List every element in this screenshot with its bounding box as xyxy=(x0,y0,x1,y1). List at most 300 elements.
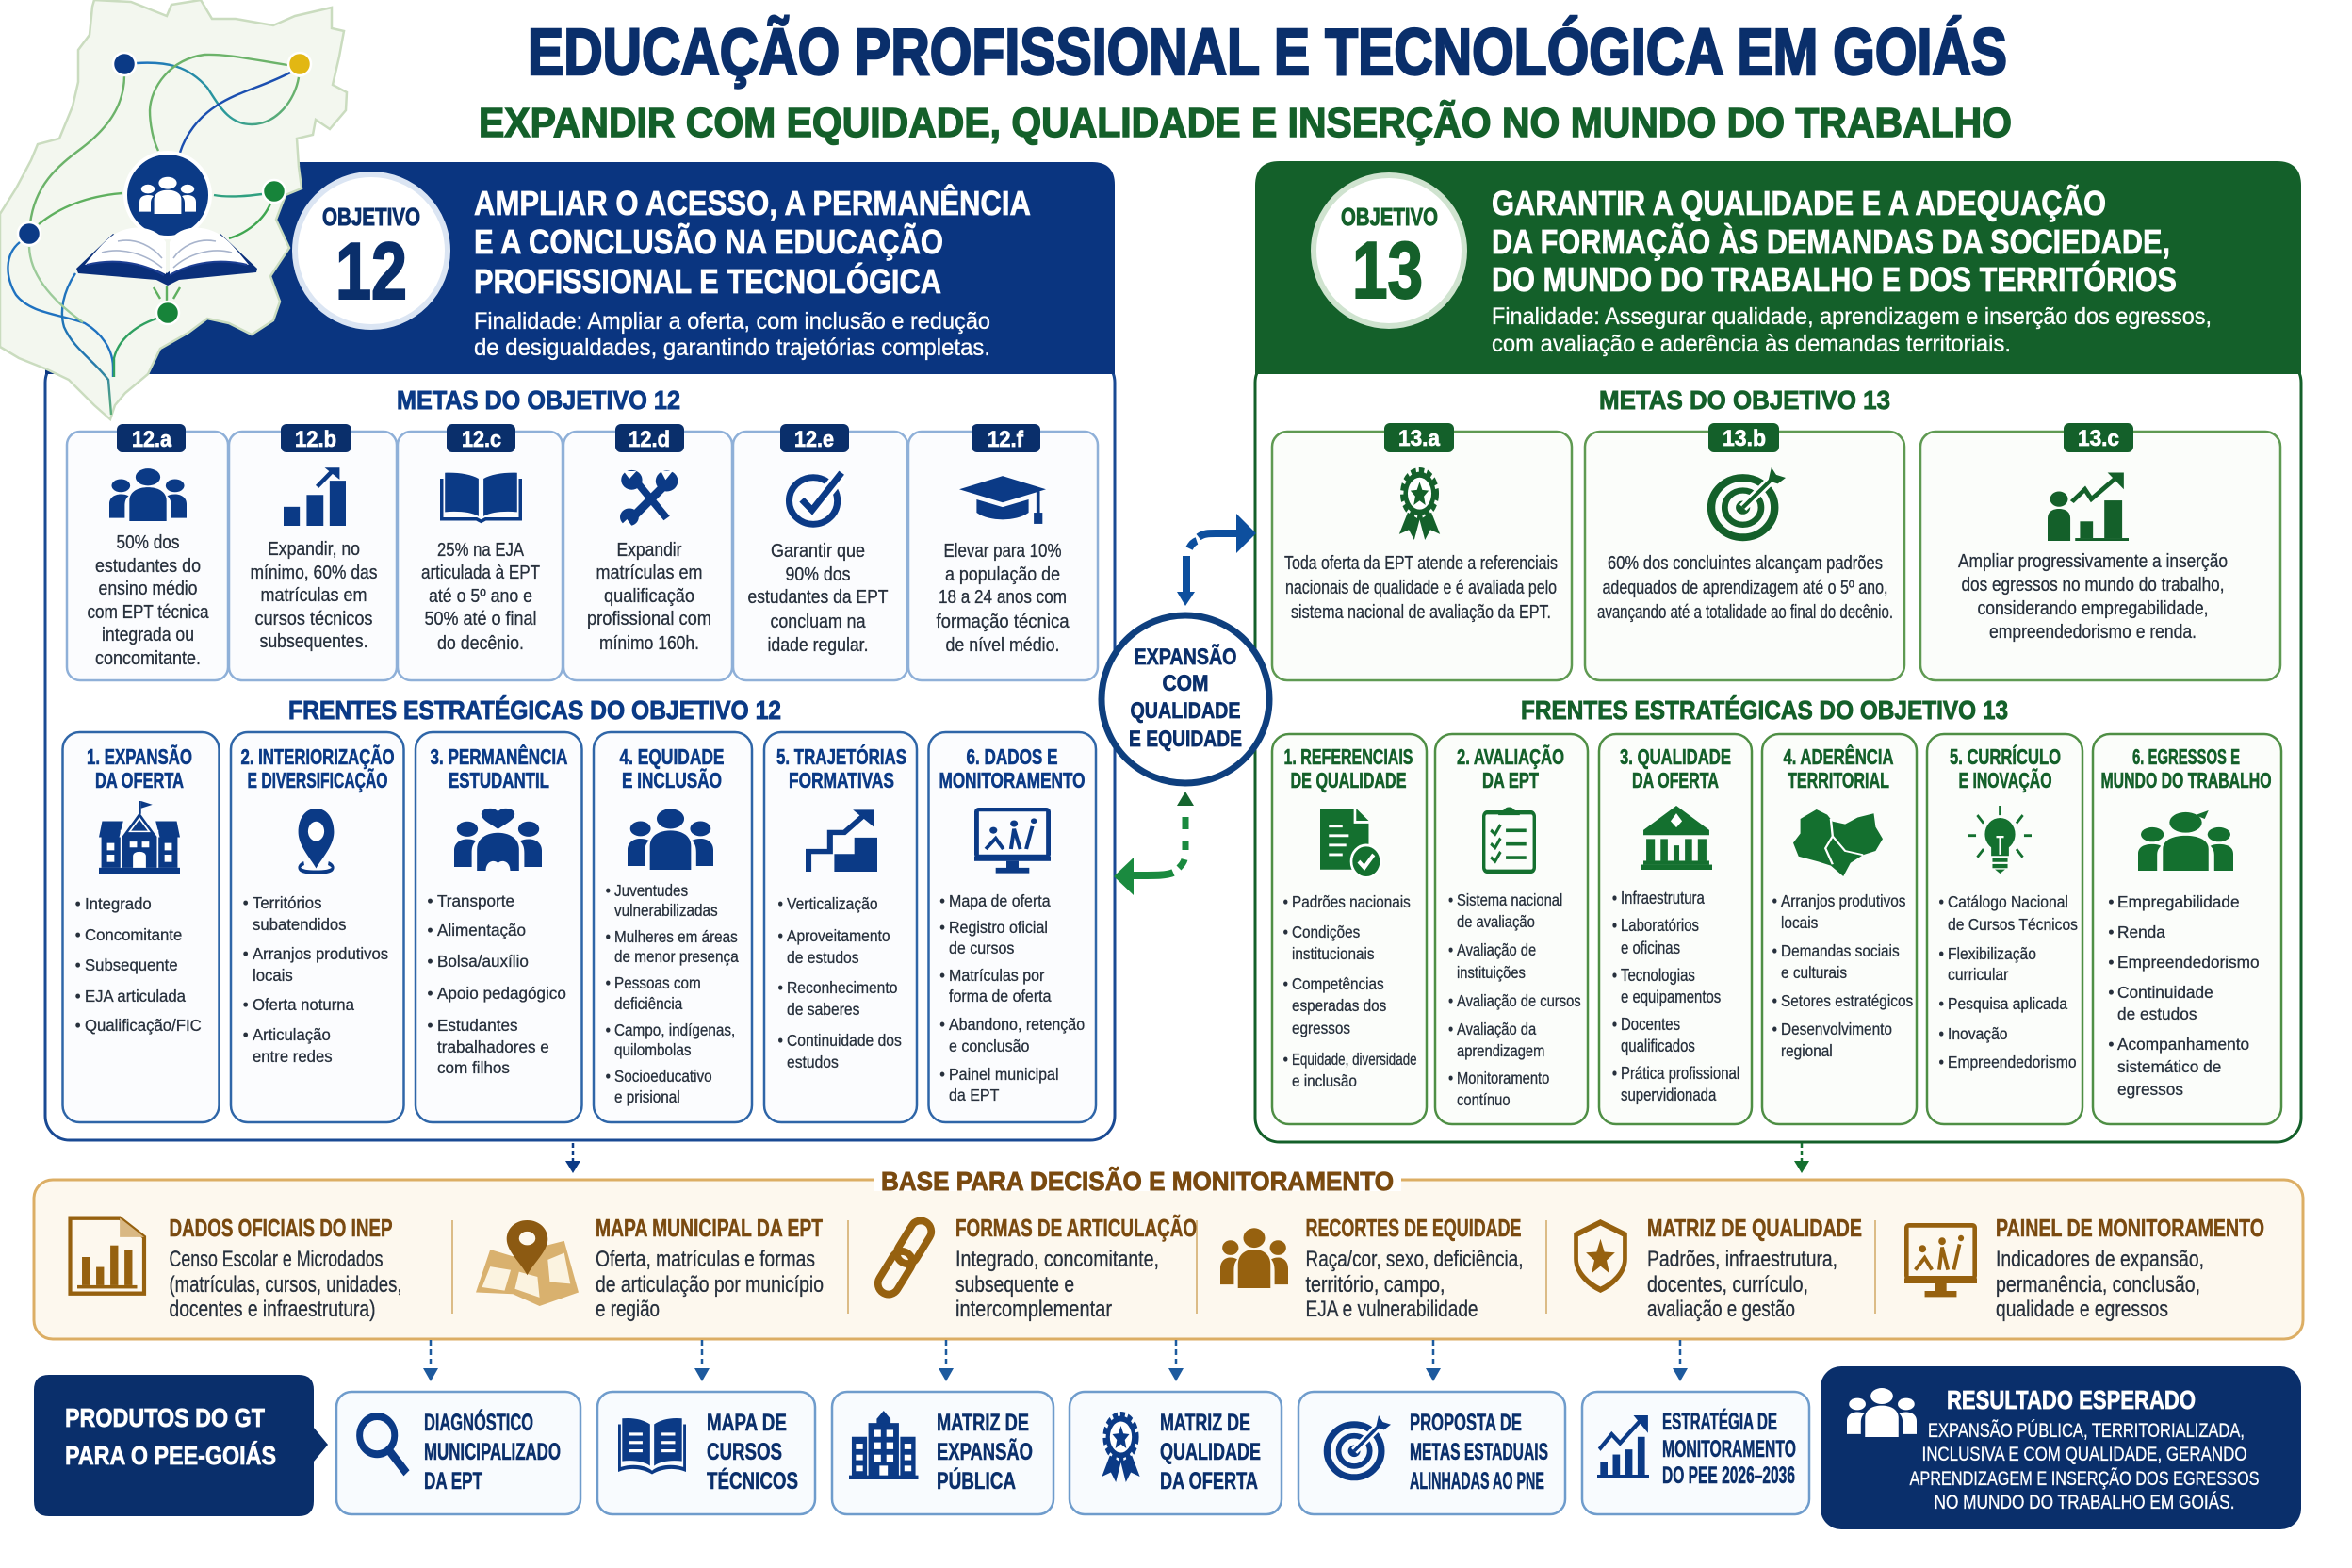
product: mapa de cursos: TÉCNICOS xyxy=(707,1467,798,1494)
product: estratégia de monitoramento: ESTRATÉGIA DE xyxy=(1662,1408,1777,1435)
badge: objetivo 12: OBJETIVO xyxy=(322,203,420,231)
frente 13.3: • xyxy=(1612,1064,1617,1083)
frente 12.6: da EPT xyxy=(949,1086,999,1104)
meta 12.f: de nível médio. xyxy=(946,635,1059,656)
base item: matriz de qualidade: MATRIZ DE QUALIDADE xyxy=(1647,1214,1862,1242)
frente 13.6: 6. EGRESSOS E xyxy=(2132,744,2240,769)
box: produtos do GT: PARA O PEE-GOIÁS xyxy=(65,1441,276,1470)
heading: metas 12: METAS DO OBJETIVO 12 xyxy=(397,385,680,415)
meta 12.a: 12.a xyxy=(132,427,172,452)
base title: BASE PARA DECISÃO E MONITORAMENTO xyxy=(881,1167,1394,1196)
badge: objetivo 13: 13 xyxy=(1352,226,1423,316)
base item: mapa municipal da EPT: de articulação por município xyxy=(596,1272,824,1298)
meta 12.a: integrada ou xyxy=(102,625,194,645)
meta 12.e: Garantir que xyxy=(771,541,865,562)
arrow: objetivo 12 to base xyxy=(565,1143,580,1173)
frente 13.6: • xyxy=(2108,1035,2114,1054)
base item: recortes de equidade: RECORTES DE EQUIDADE xyxy=(1306,1214,1521,1242)
frente 13.4: regional xyxy=(1781,1041,1833,1060)
frente 13.3: • xyxy=(1612,1015,1617,1034)
frente 13.4 xyxy=(1762,734,1917,1124)
frente 13.1 xyxy=(1272,734,1427,1124)
meta 12.c: 12.c xyxy=(462,427,501,452)
frente 13.2: • xyxy=(1448,992,1453,1010)
open book xyxy=(76,228,257,286)
frente 13.2: Sistema nacional xyxy=(1457,891,1562,909)
objetivo 12 header xyxy=(45,162,1115,374)
badge: objetivo 13 xyxy=(1314,175,1464,326)
frente 13.2: instituições xyxy=(1457,964,1526,982)
frente 13.3: • xyxy=(1612,916,1617,935)
frente 13.3: supervidionada xyxy=(1621,1086,1717,1104)
base item: matriz de qualidade: Padrões, infraestrutura, xyxy=(1647,1247,1838,1272)
frente 12.4: 4. EQUIDADE xyxy=(620,744,724,769)
meta 12.b: matrículas em xyxy=(260,585,368,606)
frente 13.5: • xyxy=(1938,892,1944,911)
frente 12.2: subatendidos xyxy=(253,914,347,934)
frente 13.1: institucionais xyxy=(1292,944,1375,963)
frente 12.4: Juventudes xyxy=(614,881,688,900)
frente 13.2: DA EPT xyxy=(1482,768,1539,792)
center hub: expansão com qualidade e equidade: EXPANSÃO xyxy=(1135,644,1236,670)
frente 13.2: 2. AVALIAÇÃO xyxy=(1457,743,1564,769)
frente 13.1: esperadas dos xyxy=(1292,996,1386,1015)
frente 12.3: • xyxy=(428,984,433,1003)
panel: objetivo 12 xyxy=(45,162,1115,1140)
frente 12.2: • xyxy=(243,994,249,1014)
meta 12.e: 90% dos xyxy=(786,564,850,585)
frente 12.4: e prisional xyxy=(614,1087,680,1106)
base item: dados oficiais do INEP: (matrículas, cursos, unidades, xyxy=(170,1272,401,1298)
frente 12.3: trabalhadores e xyxy=(437,1037,549,1056)
frente 12.2: Arranjos produtivos xyxy=(253,943,388,963)
meta 13.c: Ampliar progressivamente a inserção xyxy=(1958,551,2228,572)
box: resultado esperado: NO MUNDO DO TRABALHO EM GOIÁS. xyxy=(1934,1492,2235,1513)
meta 12.b: subsequentes. xyxy=(260,631,368,652)
frente 12.1: DA OFERTA xyxy=(95,768,184,792)
frente 13.6: • xyxy=(2108,923,2114,941)
frente 13.2: aprendizagem xyxy=(1457,1042,1544,1060)
frente 12.4: • xyxy=(606,973,611,992)
product: estratégia de monitoramento xyxy=(1582,1392,1809,1514)
frente 12.3: • xyxy=(428,952,433,971)
frente 13.6 xyxy=(2093,734,2281,1124)
meta 12.c: até o 5º ano e xyxy=(429,586,532,607)
meta 13.a: nacionais de qualidade e é avaliada pelo xyxy=(1285,578,1557,598)
frente 13.2: de avaliação xyxy=(1457,913,1535,931)
frente 12.1: • xyxy=(75,955,81,974)
product: estratégia de monitoramento: DO PEE 2026–2036 xyxy=(1662,1462,1795,1489)
meta 12.b: cursos técnicos xyxy=(254,609,373,629)
frente 13.4: • xyxy=(1772,941,1777,960)
frente 12.5: Verticalização xyxy=(787,894,878,913)
frente 13.1: • xyxy=(1283,923,1288,941)
frente 13.2: contínuo xyxy=(1457,1091,1511,1109)
frente 13.6: Continuidade xyxy=(2117,983,2213,1002)
frente 12.5: • xyxy=(777,926,783,945)
frente 12.6: Matrículas por xyxy=(949,966,1045,985)
frente 13.3: • xyxy=(1612,889,1617,907)
frente 13.6: • xyxy=(2108,892,2114,911)
frente 12.2: Territórios xyxy=(253,892,322,912)
objetivo 12 headline xyxy=(474,183,1031,301)
meta 12.a: estudantes do xyxy=(95,556,201,577)
frente 12.4: deficiência xyxy=(614,994,683,1013)
meta 12.b: mínimo, 60% das xyxy=(251,563,377,583)
frente 12.5: estudos xyxy=(787,1053,839,1071)
frente 12.6: Mapa de oferta xyxy=(949,891,1051,910)
meta 13.b: avançando até a totalidade ao final do decênio. xyxy=(1597,602,1893,623)
frente 12.2: 2. INTERIORIZAÇÃO xyxy=(241,743,394,769)
meta 12.e: concluam na xyxy=(771,612,866,632)
frente 12.3: Alimentação xyxy=(437,921,526,939)
frente 12.3: Apoio pedagógico xyxy=(437,984,566,1003)
frente 12.3 xyxy=(416,732,582,1122)
frente 12.1: • xyxy=(75,986,81,1005)
frente 12.6: Registro oficial xyxy=(949,918,1048,937)
frente 13.1: Equidade, diversidade xyxy=(1292,1050,1417,1069)
frente 12.6: • xyxy=(939,966,945,985)
arrow: hub to objetivo 13 xyxy=(1177,514,1256,606)
frente 12.5: • xyxy=(777,1031,783,1050)
meta 12.e: 12.e xyxy=(794,427,834,452)
product: diagnóstico xyxy=(336,1392,580,1514)
frente 12.4: E INCLUSÃO xyxy=(622,767,722,792)
base item: recortes de equidade: Raça/cor, sexo, deficiência, xyxy=(1306,1247,1523,1272)
frente 13.4: locais xyxy=(1781,913,1818,932)
frente 13.1: Competências xyxy=(1292,974,1384,993)
frente 13.2: Avaliação de xyxy=(1457,941,1536,959)
box: resultado esperado xyxy=(1821,1366,2301,1529)
frente 13.5: • xyxy=(1938,1024,1944,1043)
box: produtos do GT: PRODUTOS DO GT xyxy=(65,1403,265,1432)
frente 13.1: 1. REFERENCIAIS xyxy=(1283,744,1413,769)
frente 13.2: • xyxy=(1448,891,1453,909)
base item: formas de articulação: FORMAS DE ARTICULAÇÃO xyxy=(956,1214,1197,1242)
frente 12.2: • xyxy=(243,892,249,912)
frente 13.2: • xyxy=(1448,941,1453,959)
frente 12.2: Articulação xyxy=(253,1024,331,1044)
frente 13.4: Arranjos produtivos xyxy=(1781,891,1905,910)
meta 12.f xyxy=(908,424,1098,680)
frente 13.6: sistemático de xyxy=(2117,1057,2222,1076)
frente 12.6: Painel municipal xyxy=(949,1065,1058,1084)
objetivo 13 headline: DO MUNDO DO TRABALHO E DOS TERRITÓRIOS xyxy=(1492,259,2177,299)
base item: dados oficiais do INEP: DADOS OFICIAIS DO INEP xyxy=(170,1214,392,1242)
frente 12.4: quilombolas xyxy=(614,1040,692,1059)
panel: objetivo 13 xyxy=(1255,161,2301,1142)
meta 12.c: 50% até o final xyxy=(424,609,537,629)
subtitle: EXPANDIR COM EQUIDADE, QUALIDADE E INSERÇÃO NO MUNDO DO TRABALHO xyxy=(479,99,2012,146)
objetivo 12 finalidade xyxy=(474,308,990,361)
frente 12.6: e conclusão xyxy=(949,1037,1029,1055)
frente 12.6: • xyxy=(939,891,945,910)
frente 12.1: Subsequente xyxy=(85,955,178,974)
base item: mapa municipal da EPT: e região xyxy=(596,1297,660,1322)
product: proposta de metas: ALINHADAS AO PNE xyxy=(1410,1468,1544,1494)
frente 13.2: Monitoramento xyxy=(1457,1070,1549,1087)
map outline xyxy=(0,0,347,419)
base item: painel de monitoramento xyxy=(1904,1214,2264,1322)
product: matriz de expansão xyxy=(832,1392,1054,1514)
panel: base para decisão e monitoramento xyxy=(34,1167,2303,1339)
meta 13.b: 13.b xyxy=(1723,426,1766,451)
meta 12.d: mínimo 160h. xyxy=(599,633,699,654)
meta 13.b: 60% dos concluintes alcançam padrões xyxy=(1608,553,1883,574)
base item: formas de articulação: Integrado, concomitante, xyxy=(956,1247,1159,1272)
meta 12.a: 50% dos xyxy=(117,532,179,553)
frente 12.4: vulnerabilizadas xyxy=(614,901,718,920)
base item: formas de articulação: subsequente e xyxy=(956,1272,1074,1298)
box: resultado esperado: EXPANSÃO PÚBLICA, TERRITORIALIZADA, xyxy=(1928,1419,2245,1442)
meta 12.b: 12.b xyxy=(295,427,336,452)
frente 13.1: DE QUALIDADE xyxy=(1291,768,1406,792)
product: matriz de qualidade xyxy=(1070,1392,1282,1514)
frente 13.5: Flexibilização xyxy=(1948,944,2036,963)
frente 13.2: • xyxy=(1448,1070,1453,1087)
meta 12.f: Elevar para 10% xyxy=(944,541,1062,562)
product: diagnóstico: MUNICIPALIZADO xyxy=(424,1439,561,1465)
meta 12.d: matrículas em xyxy=(596,563,703,583)
frente 13.6: Renda xyxy=(2117,923,2165,941)
meta 12.c: do decênio. xyxy=(437,633,524,654)
frente 12.1: • xyxy=(75,1015,81,1035)
product: estratégia de monitoramento: MONITORAMENTO xyxy=(1662,1436,1796,1462)
meta 13.a: sistema nacional de avaliação da EPT. xyxy=(1291,602,1551,623)
frente 12.3: • xyxy=(428,921,433,939)
frente 12.5: de estudos xyxy=(787,948,859,967)
heading: frentes 12: FRENTES ESTRATÉGICAS DO OBJETIVO 12 xyxy=(288,695,781,725)
base item: recortes de equidade: território, campo, xyxy=(1306,1272,1446,1298)
frente 13.5: Inovação xyxy=(1948,1024,2008,1043)
frente 13.4: TERRITORIAL xyxy=(1788,768,1889,792)
frente 13.5: 5. CURRÍCULO xyxy=(1950,743,2061,769)
arrow: hub to objetivo 12 xyxy=(1114,792,1194,895)
frente 12.6 xyxy=(929,732,1096,1122)
objetivo 13 header xyxy=(1255,161,2301,374)
meta 12.a: concomitante. xyxy=(95,648,201,669)
frente 12.1: Integrado xyxy=(85,893,152,913)
meta 13.a xyxy=(1272,423,1572,680)
frente 13.6: egressos xyxy=(2117,1080,2183,1099)
network lines xyxy=(8,55,299,415)
frente 12.3: Transporte xyxy=(437,891,514,910)
frente 13.6: Empregabilidade xyxy=(2117,892,2240,911)
frente 13.3: e equipamentos xyxy=(1621,988,1721,1006)
frente 12.3: Bolsa/auxílio xyxy=(437,952,529,971)
meta 13.b: adequados de aprendizagem até o 5º ano, xyxy=(1602,578,1888,598)
base item: formas de articulação: intercomplementar xyxy=(956,1297,1112,1322)
frente 12.1: • xyxy=(75,924,81,944)
frente 13.3: Prática profissional xyxy=(1621,1064,1740,1083)
meta 12.a xyxy=(67,424,228,680)
frente 12.5: Reconhecimento xyxy=(787,978,897,997)
frente 12.3: com filhos xyxy=(437,1058,510,1077)
base item: painel de monitoramento: qualidade e egressos xyxy=(1996,1297,2168,1322)
frente 13.1: Condições xyxy=(1292,923,1360,941)
frente 13.2: • xyxy=(1448,1021,1453,1038)
frente 12.6: de cursos xyxy=(949,939,1014,957)
frente 13.3: Tecnologias xyxy=(1621,966,1695,985)
frente 12.4: Campo, indígenas, xyxy=(614,1021,735,1039)
meta 13.b xyxy=(1585,423,1904,680)
meta 12.a: ensino médio xyxy=(98,579,198,599)
frente 13.3: • xyxy=(1612,966,1617,985)
frente 12.1: 1. EXPANSÃO xyxy=(87,743,192,769)
frente 13.4: Desenvolvimento xyxy=(1781,1020,1892,1038)
product: proposta de metas: PROPOSTA DE xyxy=(1410,1410,1522,1436)
meta 12.b: Expandir, no xyxy=(268,539,360,560)
base item: recortes de equidade: EJA e vulnerabilidade xyxy=(1306,1297,1478,1322)
frente 13.4: • xyxy=(1772,1020,1777,1038)
frente 12.5: Continuidade dos xyxy=(787,1031,902,1050)
heading: metas 13: METAS DO OBJETIVO 13 xyxy=(1599,385,1890,415)
base item: dados oficiais do INEP: docentes e infraestrutura) xyxy=(170,1297,375,1322)
badge: objetivo 12: 12 xyxy=(335,227,407,317)
frente 12.1 xyxy=(62,732,219,1122)
center hub: expansão com qualidade e equidade: COM xyxy=(1163,671,1208,696)
frente 13.5: de Cursos Técnicos xyxy=(1948,915,2078,934)
meta 13.c: considerando empregabilidade, xyxy=(1977,598,2209,619)
badge: objetivo 12 xyxy=(295,174,448,327)
frente 13.5 xyxy=(1927,734,2082,1124)
frente 13.1: • xyxy=(1283,892,1288,911)
objetivo 12 headline: PROFISSIONAL E TECNOLÓGICA xyxy=(474,261,941,301)
product: matriz de expansão: PÚBLICA xyxy=(937,1466,1016,1494)
meta 12.d: 12.d xyxy=(629,427,670,452)
map of Goiás with network xyxy=(0,0,347,419)
center people node xyxy=(125,153,210,237)
frente 13.5: • xyxy=(1938,944,1944,963)
frente 12.3: • xyxy=(428,1016,433,1035)
arrows: base to products xyxy=(423,1340,1688,1381)
frente 13.6: Acompanhamento xyxy=(2117,1035,2249,1054)
frente 12.6: MONITORAMENTO xyxy=(939,768,1086,792)
meta 12.d: qualificação xyxy=(604,586,694,607)
meta 12.c: 25% na EJA xyxy=(437,540,525,561)
frente 12.4: Socioeducativo xyxy=(614,1067,712,1086)
frente 13.5: E INOVAÇÃO xyxy=(1958,767,2052,792)
frente 12.2: • xyxy=(243,943,249,963)
frente 12.2: • xyxy=(243,1024,249,1044)
frente 12.1: Concomitante xyxy=(85,924,182,944)
objetivo 12 finalidade: de desigualdades, garantindo trajetórias completas. xyxy=(474,335,990,361)
meta 12.d xyxy=(564,424,732,680)
frente 13.3: qualificados xyxy=(1621,1037,1695,1055)
meta 12.d: Expandir xyxy=(616,540,682,561)
base item: painel de monitoramento: Indicadores de expansão, xyxy=(1996,1247,2204,1272)
meta 13.c: empreendedorismo e renda. xyxy=(1989,622,2197,643)
center hub: expansão com qualidade e equidade: QUALIDADE xyxy=(1131,698,1240,724)
frente 13.1: e inclusão xyxy=(1292,1071,1357,1090)
frente 13.6: Empreendedorismo xyxy=(2117,953,2260,972)
frente 13.6: MUNDO DO TRABALHO xyxy=(2101,768,2271,792)
base item: painel de monitoramento: permanência, conclusão, xyxy=(1996,1272,2200,1298)
frente 12.2: entre redes xyxy=(253,1046,333,1066)
base item: mapa municipal da EPT: MAPA MUNICIPAL DA EPT xyxy=(596,1214,823,1242)
frente 13.4: Setores estratégicos xyxy=(1781,991,1913,1010)
frente 13.3: Infraestrutura xyxy=(1621,889,1706,907)
meta 13.a: Toda oferta da EPT atende a referenciais xyxy=(1284,553,1558,574)
frente 13.2: Avaliação da xyxy=(1457,1021,1537,1038)
frente 12.3: Estudantes xyxy=(437,1016,518,1035)
frente 12.1: Qualificação/FIC xyxy=(85,1015,202,1035)
objetivo 13 finalidade: com avaliação e aderência às demandas territoriais. xyxy=(1492,331,2011,357)
frente 13.3 xyxy=(1599,734,1752,1124)
frente 13.5: curricular xyxy=(1948,965,2009,984)
base item: dados oficiais do INEP: Censo Escolar e Microdados xyxy=(170,1247,383,1272)
frente 13.5: Empreendedorismo xyxy=(1948,1053,2077,1071)
frente 13.1: Padrões nacionais xyxy=(1292,892,1411,911)
box: resultado esperado: RESULTADO ESPERADO xyxy=(1947,1385,2196,1414)
frente 12.5: de saberes xyxy=(787,1000,859,1019)
frente 12.6: • xyxy=(939,1065,945,1084)
product: matriz de expansão: MATRIZ DE xyxy=(937,1410,1029,1436)
frente 12.6: • xyxy=(939,918,945,937)
frente 13.6: • xyxy=(2108,983,2114,1002)
base item: matriz de qualidade: avaliação e gestão xyxy=(1647,1297,1795,1322)
product: proposta de metas xyxy=(1298,1392,1565,1514)
heading: frentes 13: FRENTES ESTRATÉGICAS DO OBJETIVO 13 xyxy=(1521,695,2008,725)
arrow: objetivo 13 to base xyxy=(1794,1143,1809,1173)
base item: matriz de qualidade xyxy=(1576,1214,1862,1322)
frente 12.4: Pessoas com xyxy=(614,973,701,992)
frente 12.2: Oferta noturna xyxy=(253,994,354,1014)
frente 13.2 xyxy=(1435,734,1588,1124)
objetivo 13 finalidade xyxy=(1492,303,2212,357)
product: matriz de qualidade: MATRIZ DE xyxy=(1160,1410,1250,1436)
product: proposta de metas: METAS ESTADUAIS xyxy=(1410,1439,1548,1465)
frente 12.5: Aproveitamento xyxy=(787,926,890,945)
frente 13.4: • xyxy=(1772,891,1777,910)
meta 12.f: formação técnica xyxy=(937,612,1070,632)
frente 12.4: • xyxy=(606,1021,611,1039)
frente 13.6: • xyxy=(2108,953,2114,972)
meta 12.e: estudantes da EPT xyxy=(748,587,888,608)
objetivo 12 headline: E A CONCLUSÃO NA EDUCAÇÃO xyxy=(474,221,943,261)
frente 13.5: Catálogo Nacional xyxy=(1948,892,2068,911)
base item: mapa municipal da EPT xyxy=(476,1214,824,1322)
meta 12.f: 12.f xyxy=(988,427,1024,452)
frente 12.4: • xyxy=(606,881,611,900)
meta 12.c: articulada à EPT xyxy=(421,563,540,583)
meta 12.e: idade regular. xyxy=(767,635,869,656)
frente 12.5: FORMATIVAS xyxy=(789,768,894,792)
objetivo 13 finalidade: Finalidade: Assegurar qualidade, aprendizagem e inserção dos egressos, xyxy=(1492,303,2212,330)
frente 13.1: egressos xyxy=(1292,1019,1350,1037)
frente 12.2: E DIVERSIFICAÇÃO xyxy=(247,767,388,792)
frente 13.4: 4. ADERÊNCIA xyxy=(1783,743,1894,769)
frente 13.3: DA OFERTA xyxy=(1632,768,1719,792)
base item: dados oficiais do INEP xyxy=(71,1214,401,1322)
frente 12.4: Mulheres em áreas xyxy=(614,927,738,946)
base item: matriz de qualidade: docentes, currículo, xyxy=(1647,1272,1808,1298)
frente 13.1: • xyxy=(1283,974,1288,993)
frente 12.3: ESTUDANTIL xyxy=(449,768,549,792)
product: matriz de expansão: EXPANSÃO xyxy=(937,1437,1033,1465)
meta 12.b xyxy=(229,424,397,680)
product: matriz de qualidade: DA OFERTA xyxy=(1160,1468,1258,1494)
frente 13.3: e oficinas xyxy=(1621,939,1680,957)
meta 12.a: com EPT técnica xyxy=(87,602,209,623)
frente 13.5: • xyxy=(1938,1053,1944,1071)
product: diagnóstico: DA EPT xyxy=(424,1468,482,1494)
badge: objetivo 13: OBJETIVO xyxy=(1341,203,1438,231)
frente 13.3: Laboratórios xyxy=(1621,916,1699,935)
frente 12.4: • xyxy=(606,927,611,946)
frente 13.4: • xyxy=(1772,991,1777,1010)
frente 12.2: locais xyxy=(253,965,293,985)
